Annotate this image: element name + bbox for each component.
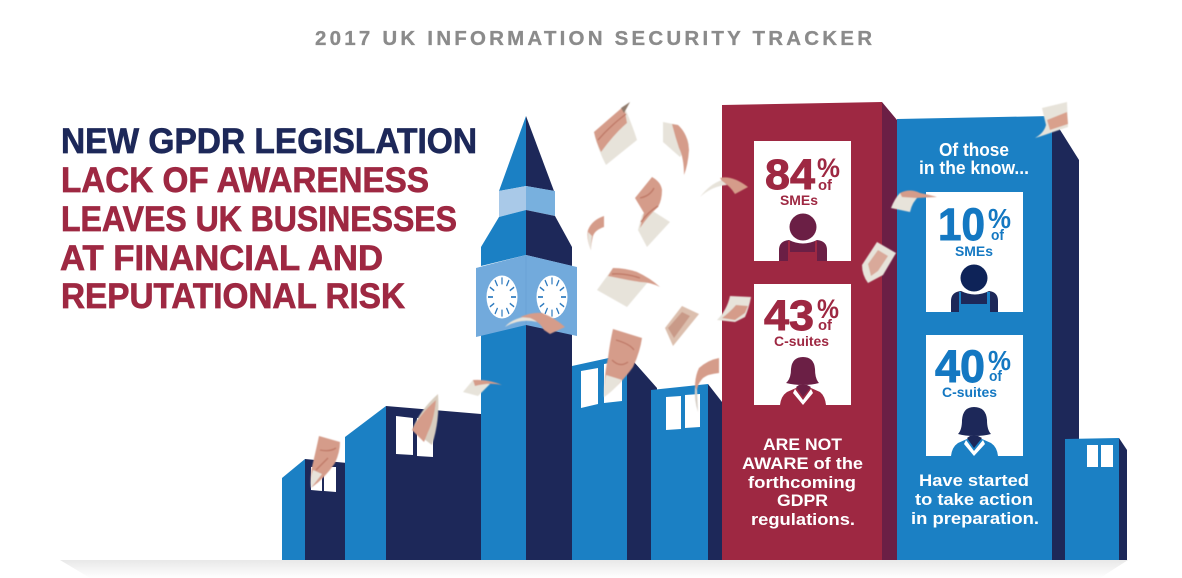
stat box: 10% of SMEs: %	[988, 203, 1011, 234]
banknote	[665, 306, 699, 346]
stat box: 10% of SMEs	[926, 192, 1023, 312]
stat box: 40% of C-suites: C-suites	[942, 384, 997, 400]
falling banknotes	[311, 102, 1068, 488]
heading line 5: REPUTATIONAL RISK	[61, 277, 405, 316]
text: started to take action: Have started	[919, 472, 1029, 490]
clock tower	[476, 116, 577, 560]
heading line: legislation: NEW GPDR LEGISLATION	[61, 122, 477, 161]
ground shadow	[60, 560, 1128, 578]
clock face right	[536, 276, 568, 318]
stat box: 43% of C-suites: 43	[764, 292, 814, 340]
text: are not aware: GDPR	[777, 492, 828, 510]
stat box: 40% of C-suites: 40	[935, 341, 985, 392]
title: 2017 UK INFORMATION SECURITY TRACKER	[315, 27, 872, 50]
building: right of tower	[572, 354, 657, 560]
text: are not aware: regulations.	[751, 511, 855, 529]
icon: SME worker	[779, 214, 827, 261]
banknote	[717, 296, 751, 322]
stat box: 43% of C-suites	[754, 284, 851, 405]
stat box: 43% of C-suites: of	[818, 318, 832, 334]
text: of those in the know: in the know...	[919, 158, 1029, 178]
tower spire	[499, 116, 554, 191]
heading line 3: LEAVES UK BUSINESSES	[61, 200, 457, 239]
text: are not aware: forthcoming	[748, 474, 856, 492]
text: of those in the know	[919, 140, 1029, 178]
stat box: 84% of SMEs: SMEs	[780, 192, 818, 208]
stat box: 40% of C-suites: of	[989, 369, 1002, 385]
icon: SME worker	[951, 264, 998, 312]
banknote	[597, 268, 660, 307]
building: far right	[1065, 438, 1127, 560]
text: are not aware: AWARE of the	[742, 455, 863, 473]
heading line 4: AT FINANCIAL AND	[60, 239, 383, 278]
banknote	[505, 313, 565, 334]
icon: executive woman	[951, 407, 998, 456]
stat box: 40% of C-suites: %	[988, 345, 1011, 376]
text: of those in the know: Of those	[939, 140, 1009, 160]
text: are not aware: ARE NOT	[763, 436, 842, 454]
stat box: 40% of C-suites	[926, 335, 1023, 456]
banknote	[594, 102, 637, 165]
stat box: 84% of SMEs: %	[817, 153, 840, 183]
text: started to take action	[911, 472, 1039, 528]
banknote	[604, 329, 642, 397]
tower band	[499, 186, 555, 217]
banknote	[463, 380, 502, 396]
stat box: 84% of SMEs	[754, 141, 851, 261]
banknote	[695, 358, 719, 412]
banknote	[311, 436, 340, 488]
stat box: 10% of SMEs: of	[991, 228, 1004, 244]
banknote	[412, 394, 438, 445]
tower shaft	[481, 320, 572, 560]
panel: not aware (red building)	[722, 102, 897, 560]
stat box: 43% of C-suites: %	[817, 294, 839, 324]
text: started to take action: in preparation.	[911, 510, 1039, 528]
heading line 2: LACK OF AWARENESS	[61, 161, 429, 200]
text: are not aware	[742, 436, 863, 529]
stat box: 10% of SMEs: SMEs	[955, 243, 993, 259]
stat box: 10% of SMEs: 10	[938, 199, 985, 250]
stat box: 84% of SMEs: of	[818, 178, 832, 194]
banknote	[663, 122, 689, 175]
banknote	[587, 216, 604, 250]
banknote	[1035, 102, 1068, 138]
panel: started action (blue building)	[897, 116, 1079, 560]
building: before red block	[651, 384, 722, 560]
stat box: 43% of C-suites: C-suites	[774, 333, 829, 349]
banknote	[862, 242, 896, 283]
building: far left	[282, 459, 358, 560]
tower roof	[481, 210, 572, 266]
building: second left	[345, 406, 481, 560]
clock housing	[476, 255, 577, 337]
banknote	[635, 177, 670, 247]
text: started to take action: to take action	[915, 491, 1033, 509]
clock face left	[486, 276, 518, 318]
heading	[60, 122, 477, 316]
banknote	[891, 190, 937, 212]
banknote	[700, 177, 748, 197]
stat box: 84% of SMEs: 84	[765, 151, 815, 199]
icon: executive woman	[780, 357, 826, 405]
